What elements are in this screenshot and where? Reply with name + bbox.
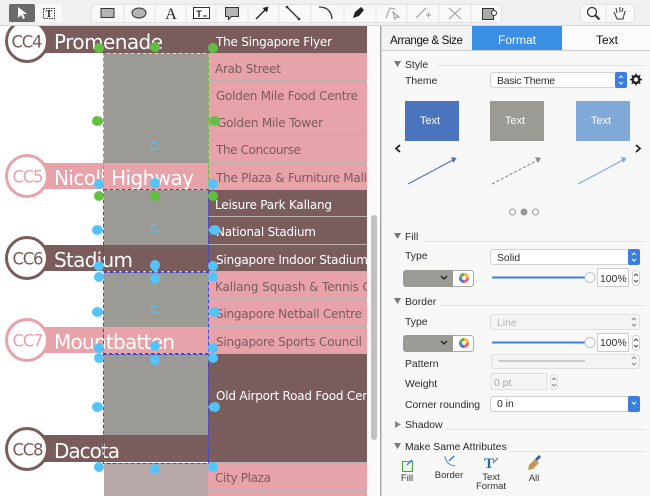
section: style: Theme (405, 76, 438, 87)
section: shadow: Shadow (405, 420, 443, 431)
fill colour well (403, 270, 474, 287)
icon: ellipse (132, 8, 146, 18)
icon: text box (194, 8, 210, 19)
section: shadow (395, 420, 646, 431)
place labels: National Stadium (216, 225, 316, 239)
theme swatches: Text (505, 115, 525, 127)
section: style: Basic Theme (497, 76, 555, 87)
station CC6 Stadium: Stadium (54, 248, 133, 272)
inspector tabs: Text (596, 33, 619, 47)
station CC6 Stadium (6, 238, 133, 278)
carousel dots (510, 208, 538, 216)
station CC7 Mountbatten: CC7 (12, 332, 44, 350)
place labels: Singapore Netball Centre (216, 307, 362, 321)
theme swatches: Text (420, 115, 440, 127)
place labels (215, 36, 367, 484)
place labels: City Plaza (215, 471, 271, 485)
theme arrows (408, 157, 626, 184)
place labels: Old Airport Road Food Centre (216, 389, 386, 403)
icon: magnifier (588, 8, 600, 20)
section: style: Style (405, 60, 428, 71)
place labels: The Plaza & Furniture Mall (215, 171, 367, 185)
icon: connector (482, 8, 496, 20)
place labels: Golden Mile Tower (217, 116, 323, 130)
section: fill: Fill (405, 232, 418, 243)
station CC4 Promenade: CC4 (12, 32, 42, 52)
place labels: Kallang Squash & Tennis Centre (215, 280, 402, 294)
station CC5 Nicoll Highway: Nicoll Highway (54, 166, 194, 190)
place labels: Leisure Park Kallang (215, 198, 332, 212)
border opacity slider: 100% (600, 338, 627, 349)
station CC5 Nicoll Highway (6, 156, 194, 196)
icon: hand (614, 7, 625, 19)
section: border: Border (405, 297, 437, 308)
place labels: Singapore Sports Council (216, 335, 362, 349)
station CC5 Nicoll Highway: CC5 (12, 168, 44, 186)
station bars (30, 26, 208, 462)
section: border: Corner rounding (405, 400, 480, 411)
border opacity slider (492, 334, 640, 352)
icon: all (528, 455, 541, 484)
green selection handles (92, 42, 220, 201)
icon: border (435, 456, 463, 481)
icon: text format (476, 456, 506, 492)
section: fill: Solid (497, 253, 520, 264)
station CC7 Mountbatten (6, 320, 175, 360)
icon: text: A (165, 6, 177, 23)
place labels: Arab Street (215, 62, 281, 76)
section: border: 0 in (497, 399, 514, 410)
selected grey shapes (104, 54, 208, 496)
icon: edit point (386, 8, 399, 19)
icon: all: All (529, 473, 539, 484)
vertical scrollbar (367, 26, 381, 496)
icon: callout (226, 8, 238, 20)
section: make same attributes: Make Same Attributes (405, 442, 507, 453)
icon: text format: T (484, 456, 494, 472)
icon: fill (401, 460, 413, 484)
icon: fill: Fill (401, 473, 413, 484)
section: border: Weight (405, 379, 437, 390)
section: fill: Type (405, 251, 428, 262)
section: fill (394, 232, 646, 287)
place labels: Singapore Indoor Stadium (216, 253, 368, 267)
station CC8 Dacota: CC8 (12, 440, 44, 460)
section: make same attributes (394, 442, 646, 492)
section: border: Type (405, 317, 428, 328)
icon: arrow (256, 6, 268, 19)
section: border: Line (497, 318, 517, 329)
icon: border: Border (435, 470, 463, 481)
icon: scissors (449, 8, 461, 19)
carousel arrows (396, 145, 640, 152)
place labels: The Singapore Flyer (215, 35, 332, 49)
blue selection handles (92, 178, 220, 474)
station CC8 Dacota: Dacota (54, 439, 120, 463)
icon: curve (319, 7, 332, 19)
selection tools (9, 4, 62, 22)
station CC4 Promenade: Promenade (54, 30, 163, 54)
station CC6 Stadium: CC6 (12, 250, 44, 268)
place rows column (208, 26, 367, 496)
icon: add point (416, 8, 431, 18)
selection tools: T (46, 9, 53, 20)
panel: inspector (380, 26, 650, 496)
panel: canvas (0, 20, 402, 496)
section: border (394, 297, 646, 412)
place labels: Golden Mile Food Centre (216, 89, 358, 103)
fill opacity slider: 100% (600, 274, 627, 285)
section: border: Pattern (405, 359, 439, 370)
icon: pen (353, 7, 364, 18)
drawing tools group (92, 4, 502, 23)
icon: text format: Format (476, 481, 506, 492)
rotation handles (151, 142, 158, 313)
icon: line (286, 6, 300, 20)
icon: gear (630, 74, 642, 86)
inspector tabs: Format (498, 33, 537, 47)
icon: text box: T (196, 9, 202, 19)
inspector tabs (382, 26, 650, 51)
inspector tabs: Arrange & Size (390, 34, 463, 47)
section: border: 0 pt (494, 378, 511, 389)
view tools group (580, 4, 634, 22)
station CC8 Dacota (6, 428, 120, 470)
theme swatches: Text (591, 115, 611, 127)
icon: text format: Text (482, 472, 500, 483)
theme swatches (405, 101, 630, 141)
place labels: The Concourse (215, 143, 301, 157)
fill opacity slider (492, 268, 640, 286)
icon: rectangle (101, 8, 114, 18)
selection outlines (104, 54, 208, 464)
station CC4 Promenade (6, 20, 163, 62)
border colour well (403, 335, 474, 352)
toolbar (0, 0, 650, 26)
station CC7 Mountbatten: Mountbatten (54, 330, 175, 354)
section: style (394, 60, 646, 88)
